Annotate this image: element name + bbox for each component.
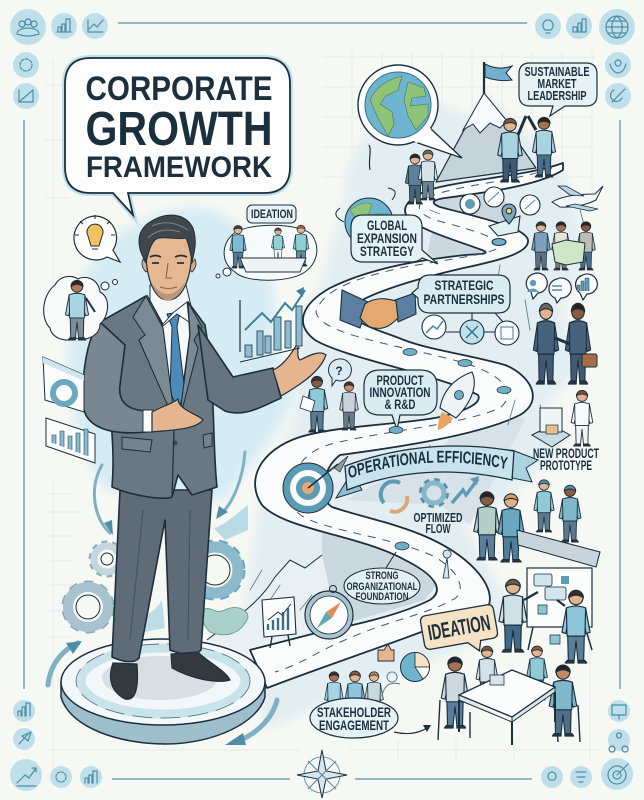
icon set: bottom left <box>10 700 102 791</box>
label: product innovation and R&D: & R&D <box>384 397 416 412</box>
question bubble <box>329 359 351 386</box>
thought cloud: ideation team <box>216 205 317 280</box>
product team <box>300 376 358 432</box>
title text: CORPORATE <box>86 70 272 108</box>
meeting table team <box>438 646 580 745</box>
arrowheads <box>66 506 246 745</box>
label: global expansion strategy: EXPANSION <box>357 230 417 246</box>
small globe <box>336 188 395 246</box>
presenter: arm on left <box>83 322 147 433</box>
factory team and conveyor <box>474 480 600 567</box>
label: stakeholder engagement: STAKEHOLDER <box>317 704 391 720</box>
presenter: tie <box>167 312 185 410</box>
label: strong organizational foundation: FOUNDATION <box>356 591 409 603</box>
label: sustainable market leadership <box>519 63 597 116</box>
winding road <box>250 163 563 688</box>
question bubble: ? <box>335 364 343 378</box>
label: sustainable market leadership: MARKET <box>538 76 577 91</box>
presenter <box>83 215 326 699</box>
globe with lens <box>358 65 462 170</box>
presenter: hands <box>152 342 326 432</box>
icon set: top right <box>535 9 635 109</box>
title text <box>86 70 272 184</box>
airplane <box>552 186 603 211</box>
pockets between road bends <box>322 192 525 622</box>
title text: GROWTH <box>86 103 272 156</box>
label: optimized flow: OPTIMIZED <box>414 510 462 525</box>
growth bar chart <box>240 287 305 362</box>
operational efficiency ribbon <box>335 445 539 499</box>
planning pair on road <box>405 150 438 204</box>
label: product innovation and R&D: INNOVATION <box>370 385 430 400</box>
label: new product prototype: NEW PRODUCT <box>533 446 599 461</box>
chart easel <box>262 597 296 648</box>
strategic partnership icons <box>526 273 597 303</box>
mountain mass <box>245 93 590 730</box>
label: strategic partnerships: STRATEGIC <box>434 277 494 293</box>
summit peak <box>436 62 536 182</box>
presenter: head <box>139 215 196 301</box>
light blue backdrop <box>68 208 295 500</box>
summit high five pair <box>498 116 556 182</box>
platform disc <box>61 639 265 744</box>
optimized flow icons <box>381 476 479 512</box>
label: new product prototype <box>533 446 599 473</box>
title text: FRAMEWORK <box>86 151 272 184</box>
prototype box and scientist <box>532 390 593 447</box>
route icons with map pin <box>460 187 540 246</box>
label: sustainable market leadership: SUSTAINABLE <box>524 64 590 79</box>
road markers <box>403 348 511 394</box>
label: new product prototype: PROTOTYPE <box>540 458 592 473</box>
presenter: arm on right <box>198 325 281 413</box>
presenter: shirt <box>150 285 192 425</box>
team reading map <box>532 222 595 270</box>
compass <box>305 586 353 639</box>
presenter: trousers <box>112 490 212 662</box>
gears <box>66 544 241 629</box>
presenter: cuff <box>143 410 153 432</box>
label: strategic partnerships <box>412 275 510 313</box>
business handshake figures <box>533 303 597 384</box>
label: sustainable market leadership: LEADERSHIP <box>528 88 587 103</box>
operational efficiency ribbon: OPERATIONAL EFFICIENCY <box>348 450 508 478</box>
stakeholder group <box>325 671 400 725</box>
label: strong organizational foundation <box>344 542 451 604</box>
icon set: bottom right <box>541 700 633 790</box>
title speech bubble <box>65 58 290 215</box>
dashboard panels <box>43 357 95 463</box>
icon set: top left <box>10 9 108 109</box>
whiteboard <box>527 568 592 650</box>
presenters at whiteboard <box>499 579 590 663</box>
label: strong organizational foundation: STRONG <box>366 570 398 582</box>
presenter: jacket body <box>100 296 217 498</box>
label: optimized flow <box>414 510 462 536</box>
label: ideation sign <box>420 604 500 660</box>
presenter: lapels <box>133 296 202 422</box>
label: strategic partnerships: PARTNERSHIPS <box>424 291 504 307</box>
label: strong organizational foundation: ORGANIZATIONAL <box>346 581 418 593</box>
big blue sweep arrows <box>48 452 277 742</box>
label: ideation sign: IDEATION <box>426 610 492 645</box>
label: optimized flow: FLOW <box>426 521 451 536</box>
presenter: shoes <box>110 652 230 699</box>
ideation small tag: IDEATION <box>251 209 293 221</box>
thought cloud: woman with tablet <box>44 277 118 340</box>
icon: compass rose <box>297 750 347 798</box>
presenter: collar <box>147 295 189 326</box>
label: stakeholder engagement: ENGAGEMENT <box>319 717 389 733</box>
partnership sub-icons <box>422 313 519 345</box>
rocket <box>438 372 474 430</box>
label: product innovation and R&D <box>364 370 437 434</box>
label: product innovation and R&D: PRODUCT <box>376 373 424 388</box>
label: stakeholder engagement <box>310 698 431 738</box>
handshake icon <box>340 290 416 328</box>
label: global expansion strategy: GLOBAL <box>367 217 407 233</box>
label: global expansion strategy: STRATEGY <box>360 243 414 259</box>
icon: light bulb bubble <box>74 215 120 262</box>
lower hills and bush <box>144 505 332 655</box>
target with arrow <box>283 456 348 513</box>
label: global expansion strategy <box>351 215 438 264</box>
stakeholder pie and thumb <box>378 644 430 682</box>
